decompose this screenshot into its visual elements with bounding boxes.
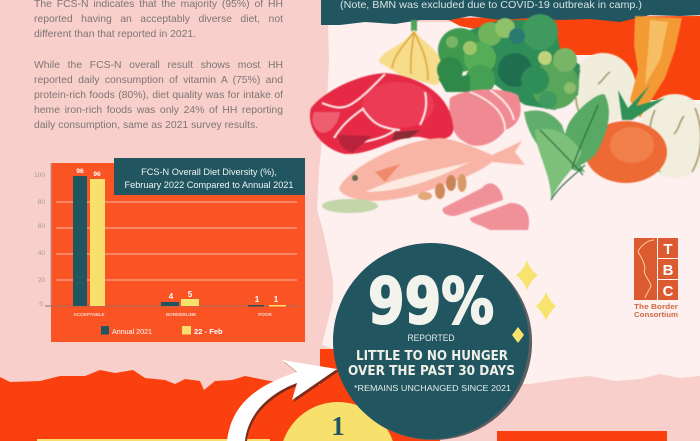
- bar chart: FCS-N overall diet diversity: [34, 158, 305, 342]
- green seeds: [322, 199, 378, 213]
- tomato: [585, 85, 667, 183]
- category labels: [73, 312, 272, 317]
- broccoli large: [470, 14, 580, 110]
- bar chart: FCS-N overall diet diversity: Annual 2021: [112, 327, 152, 336]
- headline line 1: LITTLE TO NO HUNGER: [356, 349, 508, 364]
- panel: bottom orange torn strip: [0, 349, 440, 441]
- y axis labels: 80: [38, 199, 45, 206]
- bar chart: FCS-N overall diet diversity: 5: [188, 290, 193, 299]
- logo: The Border Consortium: C: [663, 283, 674, 300]
- panel: top teal banner: [321, 0, 700, 25]
- value labels: 96: [93, 171, 101, 178]
- legend: [101, 326, 109, 334]
- logo: The Border Consortium: [634, 238, 678, 319]
- text block: FCS-N quality: While the FCS-N overall result shows most HH reported daily consumption of vitamin A (75%) and protein-rich foods (80%), diet quality was for intake of heme iron-rich foods was only 24% of HH reporting daily consumption, same as 2021 survey results.: [34, 60, 283, 131]
- category labels: POOR: [258, 312, 272, 317]
- bar chart: FCS-N overall diet diversity: February 2022 Compared to Annual 2021: [124, 180, 294, 190]
- illustration: food: [310, 14, 700, 230]
- panel: bottom left yellow box: [37, 439, 270, 441]
- y axis labels: 60: [38, 223, 45, 230]
- logo: The Border Consortium: The Border: [634, 304, 678, 311]
- bar chart: FCS-N overall diet diversity: 1: [274, 295, 279, 304]
- carrot: [630, 16, 682, 118]
- arrow: white curved: [227, 360, 339, 441]
- bar chart: FCS-N overall diet diversity: 4: [169, 292, 174, 301]
- meat slices: [449, 89, 521, 146]
- fish: [339, 138, 525, 201]
- spinach leaves: [524, 94, 609, 200]
- bar chart: FCS-N overall diet diversity: 22 - Feb: [194, 327, 223, 336]
- logo: The Border Consortium: T: [663, 241, 673, 258]
- banner note text: (Note, BMN was excluded due to COVID-19 outbreak in camp.): [340, 0, 642, 11]
- onion: [379, 20, 444, 85]
- panel: orange torn backdrop: [445, 16, 700, 100]
- y axis labels: [34, 172, 45, 308]
- panel: bottom right orange box: [497, 431, 667, 441]
- icon: sparkle medium: [536, 292, 556, 320]
- logo: The Border Consortium: Consortium: [634, 312, 678, 319]
- logo: The Border Consortium: B: [663, 262, 674, 279]
- drumsticks: [442, 183, 529, 230]
- value labels: [76, 168, 101, 178]
- bars: [73, 176, 87, 306]
- y axis labels: 20: [38, 277, 45, 284]
- chart title: [114, 158, 305, 195]
- icon: sparkle small: [512, 327, 524, 343]
- meat: [310, 73, 453, 154]
- panel: 99% stat circle: [333, 243, 532, 440]
- category labels: ACCEPTABLE: [73, 312, 105, 317]
- y axis labels: 0: [39, 301, 43, 308]
- pumpkin front: [639, 94, 700, 178]
- category labels: BORDERLINE: [166, 312, 196, 317]
- headline line 2: OVER THE PAST 30 DAYS: [348, 364, 515, 379]
- panel: yellow circle with number 1: [283, 402, 393, 441]
- bar chart: FCS-N overall diet diversity: FCS-N Overall Diet Diversity (%),: [141, 167, 277, 177]
- icon: sparkle large: [516, 260, 538, 290]
- broccoli small: [437, 28, 496, 95]
- pumpkin back: [570, 53, 636, 123]
- y axis labels: 40: [38, 250, 45, 257]
- text block: FCS-N intro: The FCS-N indicates that the majority (95%) of HH reported having an acceptably diverse diet, not different than that reported in 2021.: [34, 0, 283, 40]
- footnote: *REMAINS UNCHANGED SINCE 2021: [354, 384, 512, 393]
- panel: torn paper food background: [317, 22, 700, 384]
- reported label: REPORTED: [408, 333, 455, 343]
- value labels: 96: [76, 168, 84, 175]
- stat number: 99%: [368, 265, 494, 338]
- almonds: [418, 174, 466, 200]
- y axis labels: 100: [34, 172, 45, 179]
- bar chart: FCS-N overall diet diversity: 1: [255, 295, 260, 304]
- number 1: 1: [331, 411, 345, 441]
